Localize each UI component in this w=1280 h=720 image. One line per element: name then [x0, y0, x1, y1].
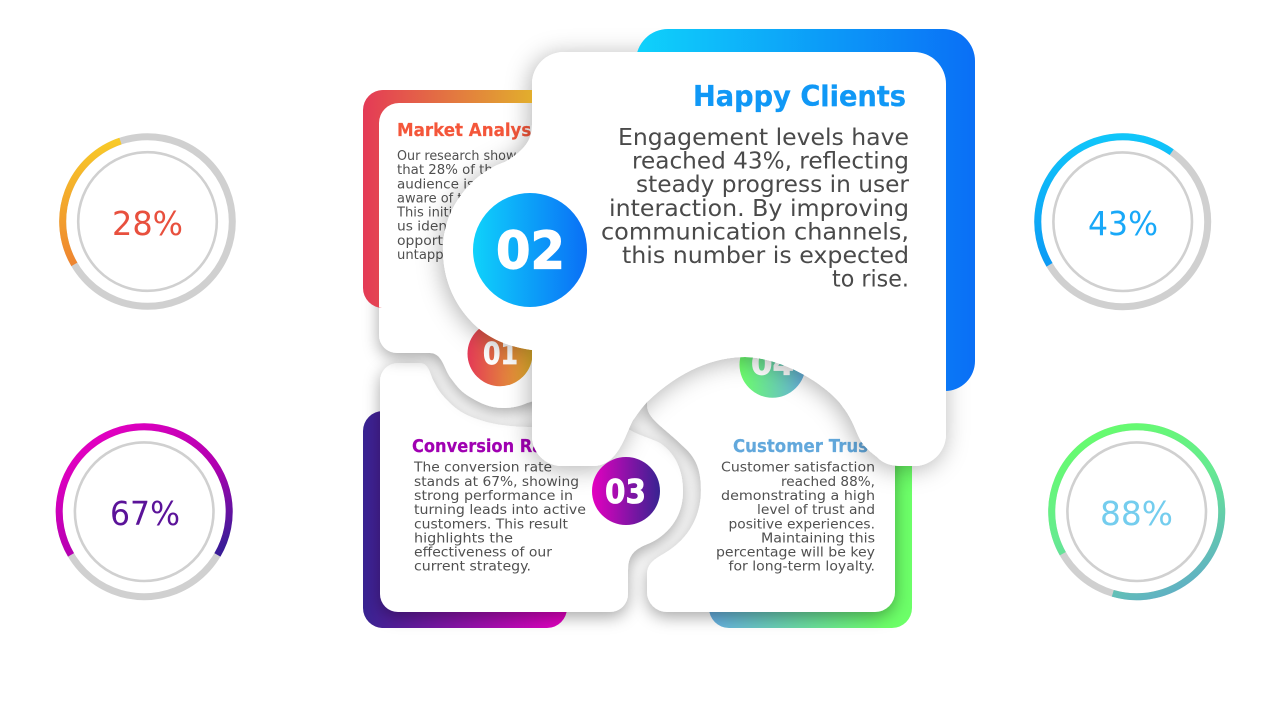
body text: customer trust — [716, 461, 875, 575]
body text: happy clients: this number is expected — [622, 241, 909, 269]
body text: customer trust: percentage will be key — [716, 546, 875, 560]
body text: market analysis: aware of the brand. — [397, 191, 525, 206]
number badge 04 — [740, 332, 806, 398]
body text: market analysis: that 28% of the — [397, 163, 501, 178]
panel: customer trust — [647, 300, 895, 612]
body text: market analysis: Our research shows — [397, 149, 523, 164]
body text: happy clients: Engagement levels have — [618, 123, 909, 151]
body text: happy clients: steady progress in user — [636, 170, 909, 198]
body text: conversion rate: turning leads into active — [414, 503, 586, 518]
card shape 03 — [380, 363, 683, 612]
body text: happy clients: to rise. — [832, 264, 909, 292]
ring: 67 percent: 67% — [110, 494, 180, 533]
colour frame: card 02 — [636, 29, 975, 391]
body text: conversion rate: highlights the — [414, 531, 513, 546]
card shape 04 — [647, 300, 895, 612]
number badge 03: 03 — [605, 472, 646, 511]
heading: happy clients: Happy Clients — [693, 80, 906, 113]
body text: customer trust: for long-term loyalty. — [728, 560, 875, 575]
number badge 01: 01 — [483, 337, 518, 372]
body text: conversion rate: strong performance in — [414, 489, 573, 504]
number badge 03 — [592, 457, 660, 525]
heading: conversion rate: Conversion Rate — [412, 437, 562, 457]
body text: customer trust: Customer satisfaction — [721, 461, 875, 476]
number badge 02 — [473, 193, 587, 307]
number badge 04: 04 — [751, 346, 794, 382]
body text: customer trust: positive experiences. — [728, 517, 875, 532]
ring: 88 percent: 88% — [1100, 494, 1173, 533]
body text: conversion rate: customers. This result — [414, 517, 568, 532]
number badge 01 — [468, 321, 532, 386]
body text: market analysis — [396, 149, 537, 263]
body text: market analysis: untapped markets. — [397, 248, 522, 263]
colour frame: card 03 — [363, 411, 567, 628]
body text: customer trust: level of trust and — [757, 503, 875, 518]
heading: customer trust: Customer Trust — [733, 437, 876, 457]
card shape 02 — [443, 52, 946, 466]
body text: customer trust: demonstrating a high — [721, 489, 875, 504]
body text: happy clients — [601, 123, 909, 292]
panel: happy clients — [363, 29, 975, 466]
ring: 88 percent — [1052, 427, 1222, 597]
body text: conversion rate — [413, 461, 586, 575]
colour frame: card 01 — [363, 90, 540, 308]
body text: happy clients: interaction. By improving — [609, 194, 909, 222]
body text: market analysis: audience is only — [397, 177, 507, 192]
body text: market analysis: us identify new — [397, 220, 502, 235]
heading: market analysis: Market Analysis — [397, 121, 547, 141]
panel: market analysis — [379, 103, 620, 408]
body text: market analysis: opportunities in — [397, 234, 507, 249]
body text: conversion rate: effectiveness of our — [414, 546, 553, 560]
ring: 28 percent — [63, 137, 232, 306]
body text: customer trust: reached 88%, — [781, 475, 875, 490]
body text: happy clients: reached 43%, reflecting — [632, 147, 909, 175]
body text: conversion rate: current strategy. — [414, 560, 531, 575]
ring: 43 percent: 43% — [1088, 204, 1158, 243]
card shape 01 — [379, 103, 620, 408]
panel: conversion rate — [380, 363, 683, 612]
ring: 28 percent: 28% — [112, 204, 183, 243]
body text: happy clients: communication channels, — [601, 217, 909, 245]
body text: conversion rate: stands at 67%, showing — [414, 475, 579, 490]
body text: market analysis: This initial data helps — [396, 206, 537, 221]
colour frame: card 04 — [709, 420, 912, 628]
number badge 02: 02 — [496, 222, 565, 282]
body text: conversion rate: The conversion rate — [413, 461, 552, 476]
ring: 43 percent — [1038, 137, 1208, 307]
body text: customer trust: Maintaining this — [761, 531, 875, 546]
ring: 67 percent — [59, 427, 229, 597]
